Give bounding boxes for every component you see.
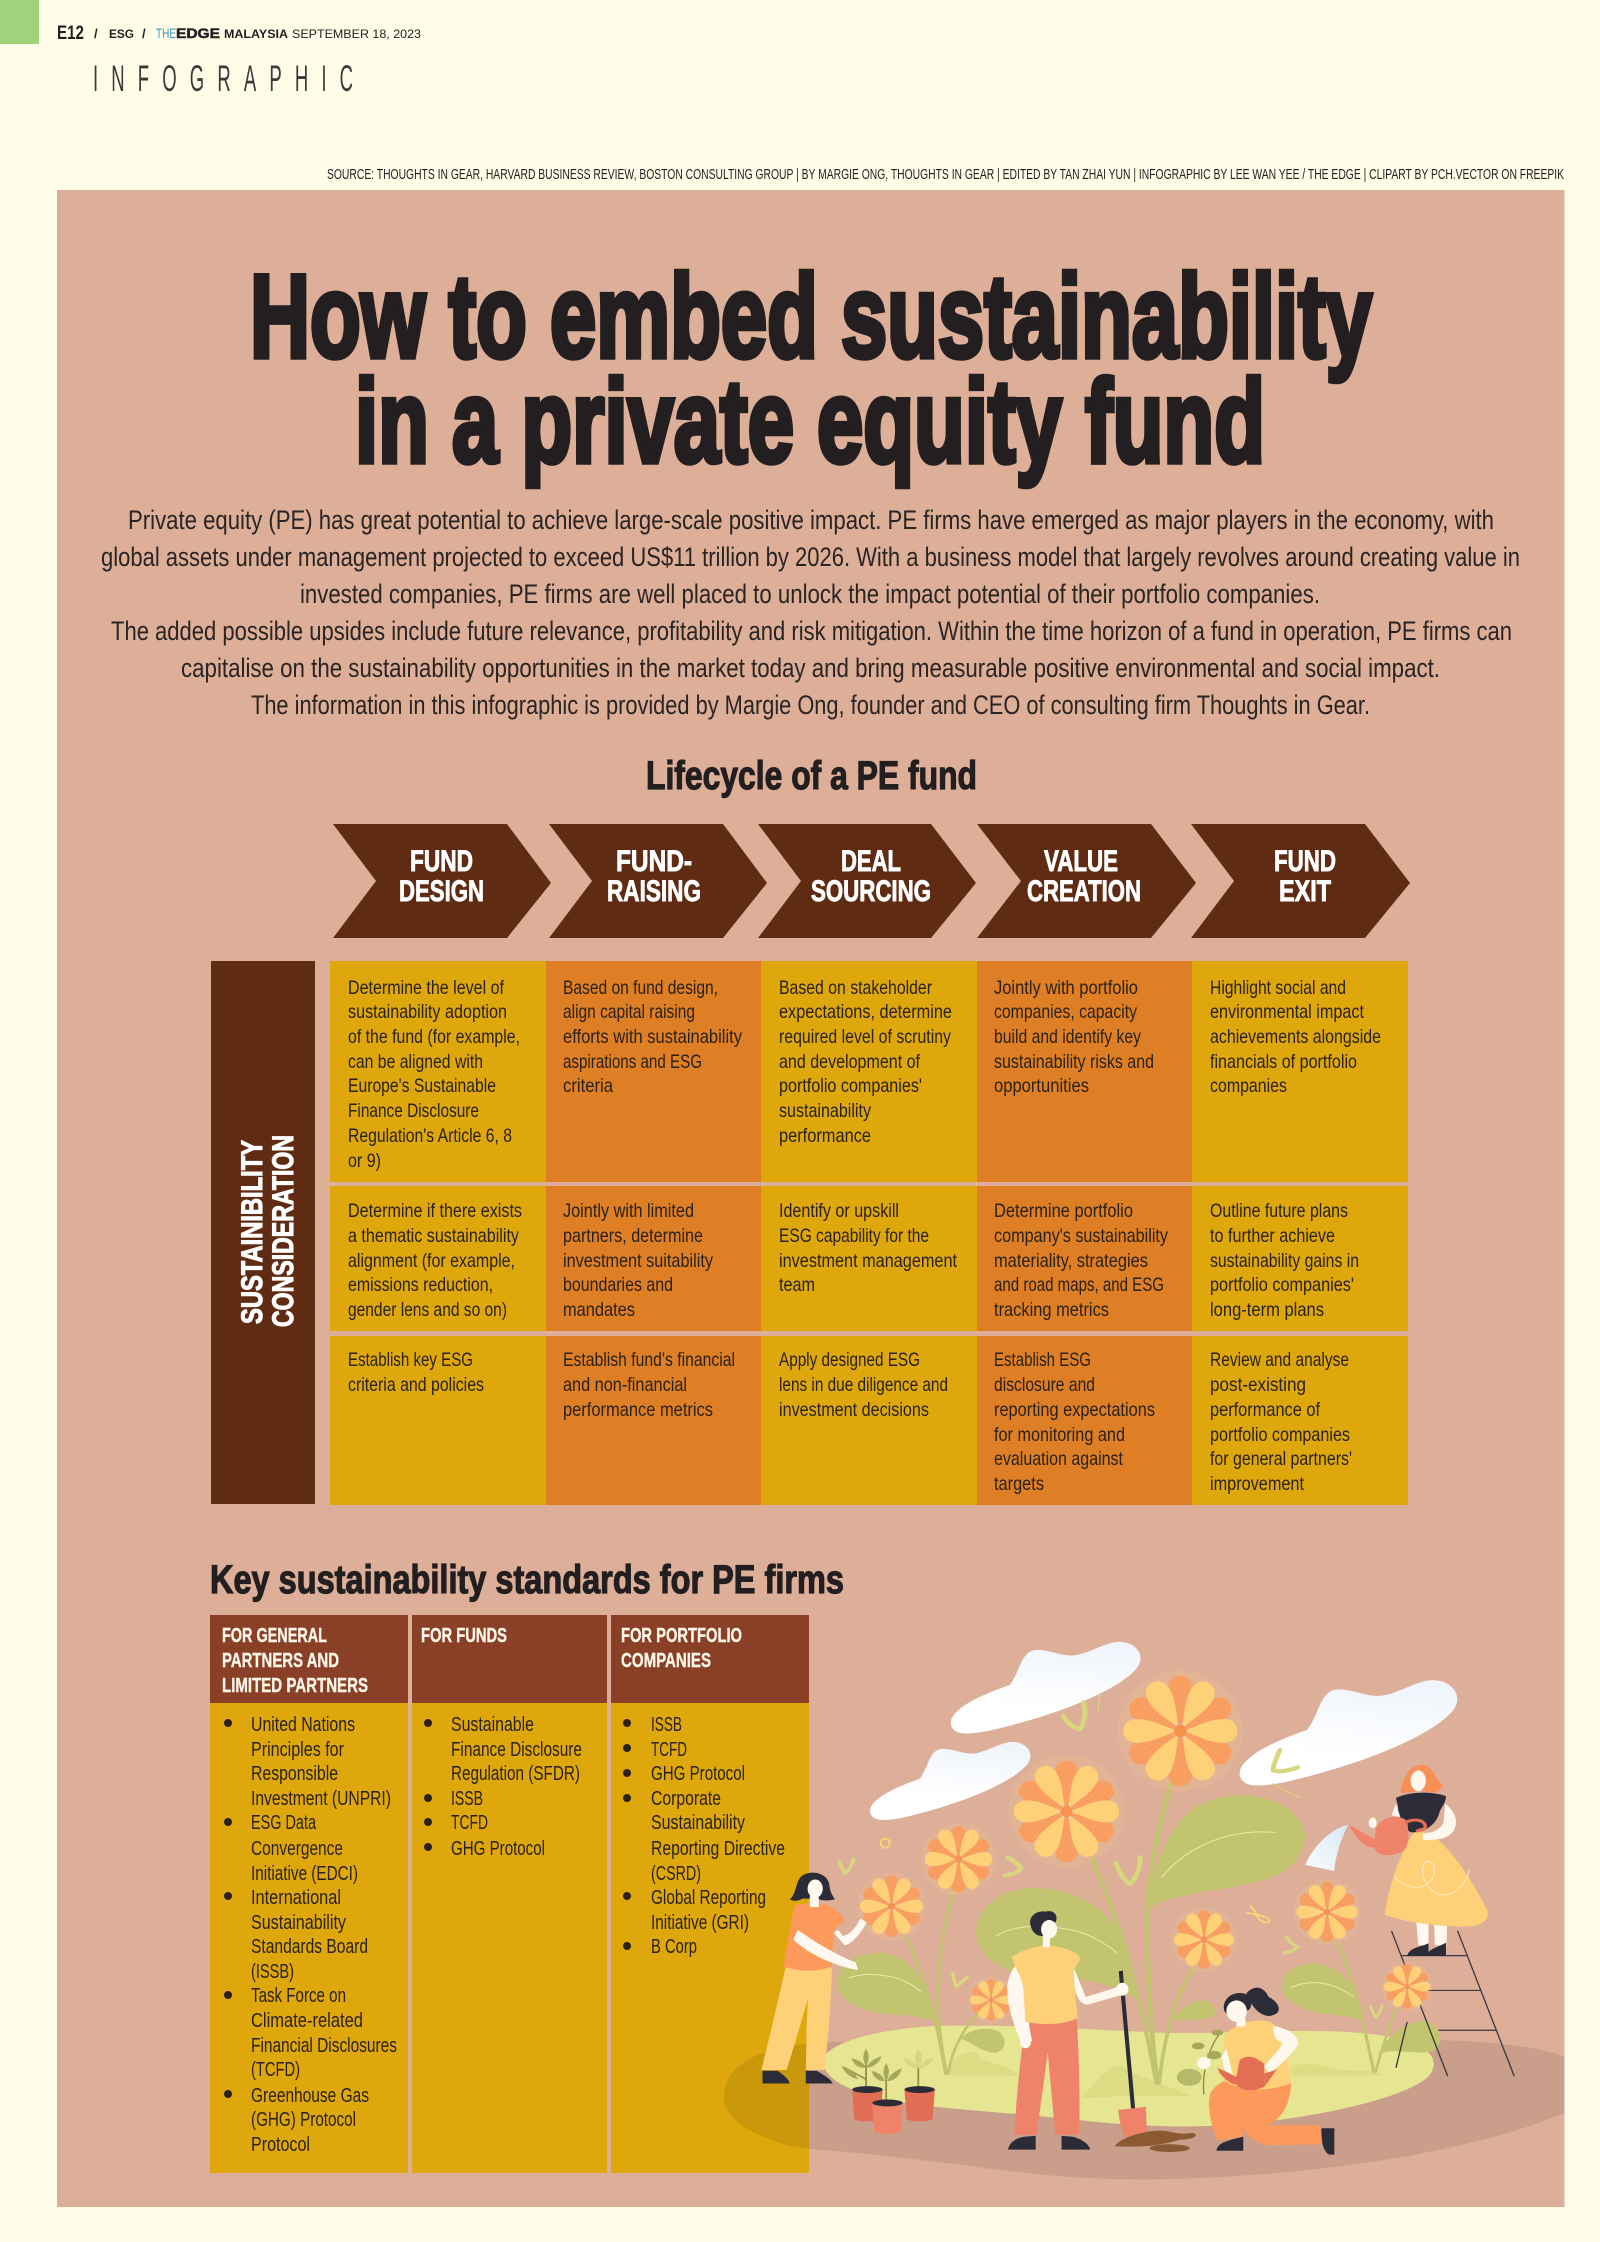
row 1, fund design (330, 961, 546, 1182)
flower right (1293, 1879, 1361, 1945)
standards column: portfolio companies: GHG Protocol (651, 1762, 745, 1785)
running header: ESG (109, 27, 134, 41)
row 1, deal sourcing: expectations, determine (779, 1001, 952, 1023)
chevron: fund design: FUND (410, 845, 473, 878)
row 3, fund design (330, 1336, 546, 1505)
row 2, value creation (977, 1186, 1192, 1331)
row 1, fund-raising: criteria (563, 1075, 613, 1097)
row 2, fund exit: Outline future plans (1210, 1200, 1348, 1222)
table: lifecycle considerations (330, 961, 1408, 1505)
row 1, deal sourcing: portfolio companies' (779, 1075, 922, 1097)
standards column: general partners and limited partners: PARTNERS AND (222, 1649, 339, 1672)
standards column: portfolio companies: Initiative (GRI) (651, 1911, 749, 1934)
man with shovel (1007, 1911, 1196, 2152)
standards column: portfolio companies: Sustainability (651, 1811, 746, 1834)
standards column: general partners and limited partners: International (251, 1886, 341, 1909)
row 1, deal sourcing: and development of (779, 1051, 920, 1073)
row 3, fund-raising: performance metrics (563, 1399, 713, 1421)
row 2, fund-raising (546, 1186, 761, 1331)
chevron: value creation (977, 824, 1196, 938)
row 1, value creation: companies, capacity (994, 1001, 1137, 1023)
row 2, fund design: Determine if there exists (348, 1200, 522, 1222)
running header: / (142, 26, 146, 41)
row 2, deal sourcing: team (779, 1274, 815, 1296)
row 2, fund-raising: partners, determine (563, 1225, 703, 1247)
row 3, value creation (977, 1336, 1192, 1505)
standards column: funds: ISSB (451, 1787, 483, 1810)
standards column: funds (412, 1615, 607, 2173)
woman touching flower (761, 1873, 867, 2083)
row 1, fund-raising: aspirations and ESG (563, 1051, 702, 1073)
row 3, value creation: targets (994, 1473, 1044, 1495)
row 3, fund exit: performance of (1210, 1399, 1320, 1421)
heading: key sustainability standards: Key sustainability standards for PE firms (210, 1558, 844, 1602)
row 1, fund-raising: align capital raising (563, 1001, 695, 1023)
row 3, value creation: for monitoring and (994, 1424, 1125, 1446)
standards column: general partners and limited partners: Climate-related (251, 2009, 363, 2032)
standards column: general partners and limited partners: Principles for (251, 1738, 344, 1761)
row 1, value creation: sustainability risks and (994, 1051, 1154, 1073)
row 3, fund-raising (546, 1336, 761, 1505)
potted seedlings (842, 2049, 935, 2134)
row 3, deal sourcing (761, 1336, 977, 1505)
small flower near ladder (1382, 1962, 1433, 2011)
standards column: portfolio companies: Corporate (651, 1787, 721, 1810)
standards column: portfolio companies: ISSB (651, 1713, 682, 1736)
standards column: general partners and limited partners: Task Force on (251, 1984, 346, 2007)
row 2, deal sourcing: ESG capability for the (779, 1225, 929, 1247)
row 3, fund exit: post-existing (1210, 1374, 1306, 1396)
standards column: general partners and limited partners: Standards Board (251, 1935, 368, 1958)
garden ground (823, 2026, 1434, 2126)
row 2, fund-raising: boundaries and (563, 1274, 673, 1296)
standards column: portfolio companies (611, 1615, 809, 2173)
row 3, fund exit: for general partners' (1210, 1448, 1352, 1470)
row 2, deal sourcing: Identify or upskill (779, 1200, 899, 1222)
illustration: people planting a garden (761, 1642, 1514, 2155)
standards column: portfolio companies: (CSRD) (651, 1862, 701, 1885)
illustration: ground shadow (724, 2040, 1564, 2179)
flower beside woman (857, 1872, 926, 1940)
floating leaf sprigs (839, 1693, 1382, 2017)
chevron: fund exit: FUND (1274, 845, 1336, 878)
row 1, deal sourcing: sustainability (779, 1100, 871, 1122)
row 1, value creation (977, 961, 1192, 1182)
row 3, fund design: criteria and policies (348, 1374, 484, 1396)
intro text block (101, 505, 1520, 720)
heading: lifecycle of a PE fund: Lifecycle of a PE fund (646, 754, 977, 798)
row 1, fund design: sustainability adoption (348, 1001, 507, 1023)
row 2, fund exit (1192, 1186, 1408, 1331)
row 1, fund exit: achievements alongside (1210, 1026, 1381, 1048)
row 3, fund-raising: Establish fund's financial (563, 1349, 735, 1371)
chevron: fund-raising: RAISING (607, 875, 701, 908)
row 2, fund exit: portfolio companies' (1210, 1274, 1354, 1296)
title (250, 251, 1372, 488)
row 2, fund design: alignment (for example, (348, 1250, 515, 1272)
standards column: general partners and limited partners: ESG Data (251, 1811, 316, 1834)
row 2, value creation: tracking metrics (994, 1299, 1109, 1321)
row 1, deal sourcing: performance (779, 1125, 871, 1147)
row 2, fund exit: sustainability gains in (1210, 1250, 1359, 1272)
standards column: general partners and limited partners: Investment (UNPRI) (251, 1787, 391, 1810)
row 1, value creation: Jointly with portfolio (994, 977, 1138, 999)
standards column: general partners and limited partners: (TCFD) (251, 2058, 300, 2081)
flower stems (907, 1781, 1396, 2083)
row 1, deal sourcing (761, 961, 977, 1182)
row 2, fund-raising: mandates (563, 1299, 635, 1321)
standards column: general partners and limited partners: Convergence (251, 1837, 343, 1860)
soil pile (1115, 2131, 1196, 2152)
standards column: general partners and limited partners: (GHG) Protocol (251, 2108, 356, 2131)
row 1, fund exit: financials of portfolio (1210, 1051, 1357, 1073)
row 2, deal sourcing: investment management (779, 1250, 957, 1272)
row 2, value creation: company's sustainability (994, 1225, 1168, 1247)
row 1, fund exit (1192, 961, 1408, 1182)
running header: THE (156, 25, 176, 41)
row 1, fund design: Determine the level of (348, 977, 504, 999)
leaves (838, 1795, 1440, 2054)
sidebar: sustainability consideration (211, 961, 315, 1504)
row 3, deal sourcing: Apply designed ESG (779, 1349, 920, 1371)
chevron: fund design: DESIGN (399, 875, 484, 908)
running header: EDGE (176, 25, 220, 41)
standards column: funds: Regulation (SFDR) (451, 1762, 580, 1785)
row 3, fund exit: improvement (1210, 1473, 1304, 1495)
row 2, fund-raising: Jointly with limited (563, 1200, 694, 1222)
standards column: funds: Sustainable (451, 1713, 534, 1736)
row 3, deal sourcing: investment decisions (779, 1399, 929, 1421)
row 3, value creation: evaluation against (994, 1448, 1123, 1470)
row 3, value creation: Establish ESG (994, 1349, 1091, 1371)
row 1, fund-raising: Based on fund design, (563, 977, 718, 999)
standards column: portfolio companies: TCFD (651, 1738, 687, 1761)
sidebar: sustainability consideration: CONSIDERATION (267, 1135, 300, 1327)
chevron: deal sourcing: SOURCING (811, 875, 931, 908)
chevron: deal sourcing: DEAL (841, 845, 901, 878)
standards column: portfolio companies: Global Reporting (651, 1886, 766, 1909)
large flower (1118, 1670, 1243, 1792)
row 1, fund design: or 9) (348, 1150, 381, 1172)
standards column: funds: Finance Disclosure (451, 1738, 582, 1761)
row 3, fund exit (1192, 1336, 1408, 1505)
chevron: deal sourcing (758, 824, 976, 938)
row 1, fund design: of the fund (for example, (348, 1026, 520, 1048)
running header (57, 23, 421, 44)
running header: SEPTEMBER 18, 2023 (292, 27, 421, 41)
standards column: general partners and limited partners: Responsible (251, 1762, 338, 1785)
standards column: general partners and limited partners: Sustainability (251, 1911, 347, 1934)
standards column: general partners and limited partners: FOR GENERAL (222, 1624, 327, 1647)
row 1, value creation: opportunities (994, 1075, 1089, 1097)
running header: / (94, 26, 98, 41)
sidebar: sustainability consideration: SUSTAINIBILITY (236, 1140, 269, 1324)
row 2, fund exit: to further achieve (1210, 1225, 1335, 1247)
flower (921, 1823, 996, 1896)
standards column: general partners and limited partners: United Nations (251, 1713, 355, 1736)
row 3, value creation: disclosure and (994, 1374, 1095, 1396)
row 1, fund design: can be aligned with (348, 1051, 483, 1073)
chevron: fund exit (1191, 824, 1410, 938)
standards column: portfolio companies: Reporting Directive (651, 1837, 785, 1860)
row 2, value creation: and road maps, and ESG (994, 1274, 1164, 1296)
row 1, deal sourcing: required level of scrutiny (779, 1026, 951, 1048)
standards column: portfolio companies: FOR PORTFOLIO (621, 1624, 742, 1647)
standards column: general partners and limited partners: (ISSB) (251, 1960, 294, 1983)
chevron: fund-raising (549, 824, 767, 938)
row 1, fund exit: environmental impact (1210, 1001, 1364, 1023)
standards column: general partners and limited partners: Initiative (EDCI) (251, 1862, 358, 1885)
chevron: value creation: CREATION (1027, 875, 1141, 908)
standards column: funds: TCFD (451, 1811, 488, 1834)
chevron: fund exit: EXIT (1279, 875, 1331, 908)
small flower (968, 1977, 1014, 2023)
lifecycle chevrons (333, 824, 1410, 938)
row 3, value creation: reporting expectations (994, 1399, 1155, 1421)
row 1, fund exit: companies (1210, 1075, 1287, 1097)
row 2, fund-raising: investment suitability (563, 1250, 713, 1272)
standards column: general partners and limited partners: Protocol (251, 2133, 310, 2156)
row 1, fund exit: Highlight social and (1210, 977, 1346, 999)
intro text block: The information in this infographic is provided by Margie Ong, founder and CEO of consulting firm Thoughts in Gear. (251, 690, 1370, 720)
row 1, fund design: Regulation's Article 6, 8 (348, 1125, 512, 1147)
row 2, fund design: emissions reduction, (348, 1274, 493, 1296)
row 2, value creation: materiality, strategies (994, 1250, 1148, 1272)
ladder (1391, 1931, 1514, 2076)
row 3, fund exit: Review and analyse (1210, 1349, 1349, 1371)
standards column: general partners and limited partners: Financial Disclosures (251, 2034, 397, 2057)
second flower (1009, 1756, 1124, 1867)
soil mounds (947, 2052, 1383, 2098)
row 2, fund design: a thematic sustainability (348, 1225, 519, 1247)
standards column: funds: GHG Protocol (451, 1837, 545, 1860)
standards column: portfolio companies: COMPANIES (621, 1649, 711, 1672)
row 2, fund exit: long-term plans (1210, 1299, 1324, 1321)
row 1, fund design: Finance Disclosure (348, 1100, 479, 1122)
standards column: general partners and limited partners: Greenhouse Gas (251, 2084, 369, 2107)
standards column: funds: FOR FUNDS (421, 1624, 507, 1647)
row 3, deal sourcing: lens in due diligence and (779, 1374, 948, 1396)
green page tab (0, 0, 39, 44)
row 3, fund-raising: and non-financial (563, 1374, 687, 1396)
section label: infographic: INFOGRAPHIC (93, 59, 353, 100)
running header: E12 (57, 23, 84, 44)
kneeling woman with seedling (1177, 1988, 1334, 2155)
row 1, value creation: build and identify key (994, 1026, 1141, 1048)
woman on ladder with watering can (1305, 1765, 1488, 1956)
chevron: fund-raising: FUND- (616, 845, 692, 878)
row 1, fund-raising (546, 961, 761, 1182)
chevron: fund design (333, 824, 551, 938)
row 2, fund design (330, 1186, 546, 1331)
row 1, fund-raising: efforts with sustainability (563, 1026, 742, 1048)
standards column: general partners and limited partners (210, 1615, 408, 2173)
chevron: value creation: VALUE (1044, 845, 1118, 878)
intro text block: invested companies, PE firms are well placed to unlock the impact potential of their portfolio companies. (300, 579, 1320, 609)
row 2, deal sourcing (761, 1186, 977, 1331)
standards column: portfolio companies: B Corp (651, 1935, 697, 1958)
running header: MALAYSIA (224, 27, 288, 41)
row 1, deal sourcing: Based on stakeholder (779, 977, 932, 999)
row 3, fund exit: portfolio companies (1210, 1424, 1350, 1446)
row 3, fund design: Establish key ESG (348, 1349, 473, 1371)
flower centre right (1171, 1907, 1237, 1972)
row 1, fund design: Europe's Sustainable (348, 1075, 496, 1097)
yellow doodles (881, 1839, 1270, 1922)
row 2, fund design: gender lens and so on) (348, 1299, 507, 1321)
clouds (870, 1642, 1457, 1820)
standards column: general partners and limited partners: LIMITED PARTNERS (222, 1674, 368, 1697)
row 2, value creation: Determine portfolio (994, 1200, 1133, 1222)
